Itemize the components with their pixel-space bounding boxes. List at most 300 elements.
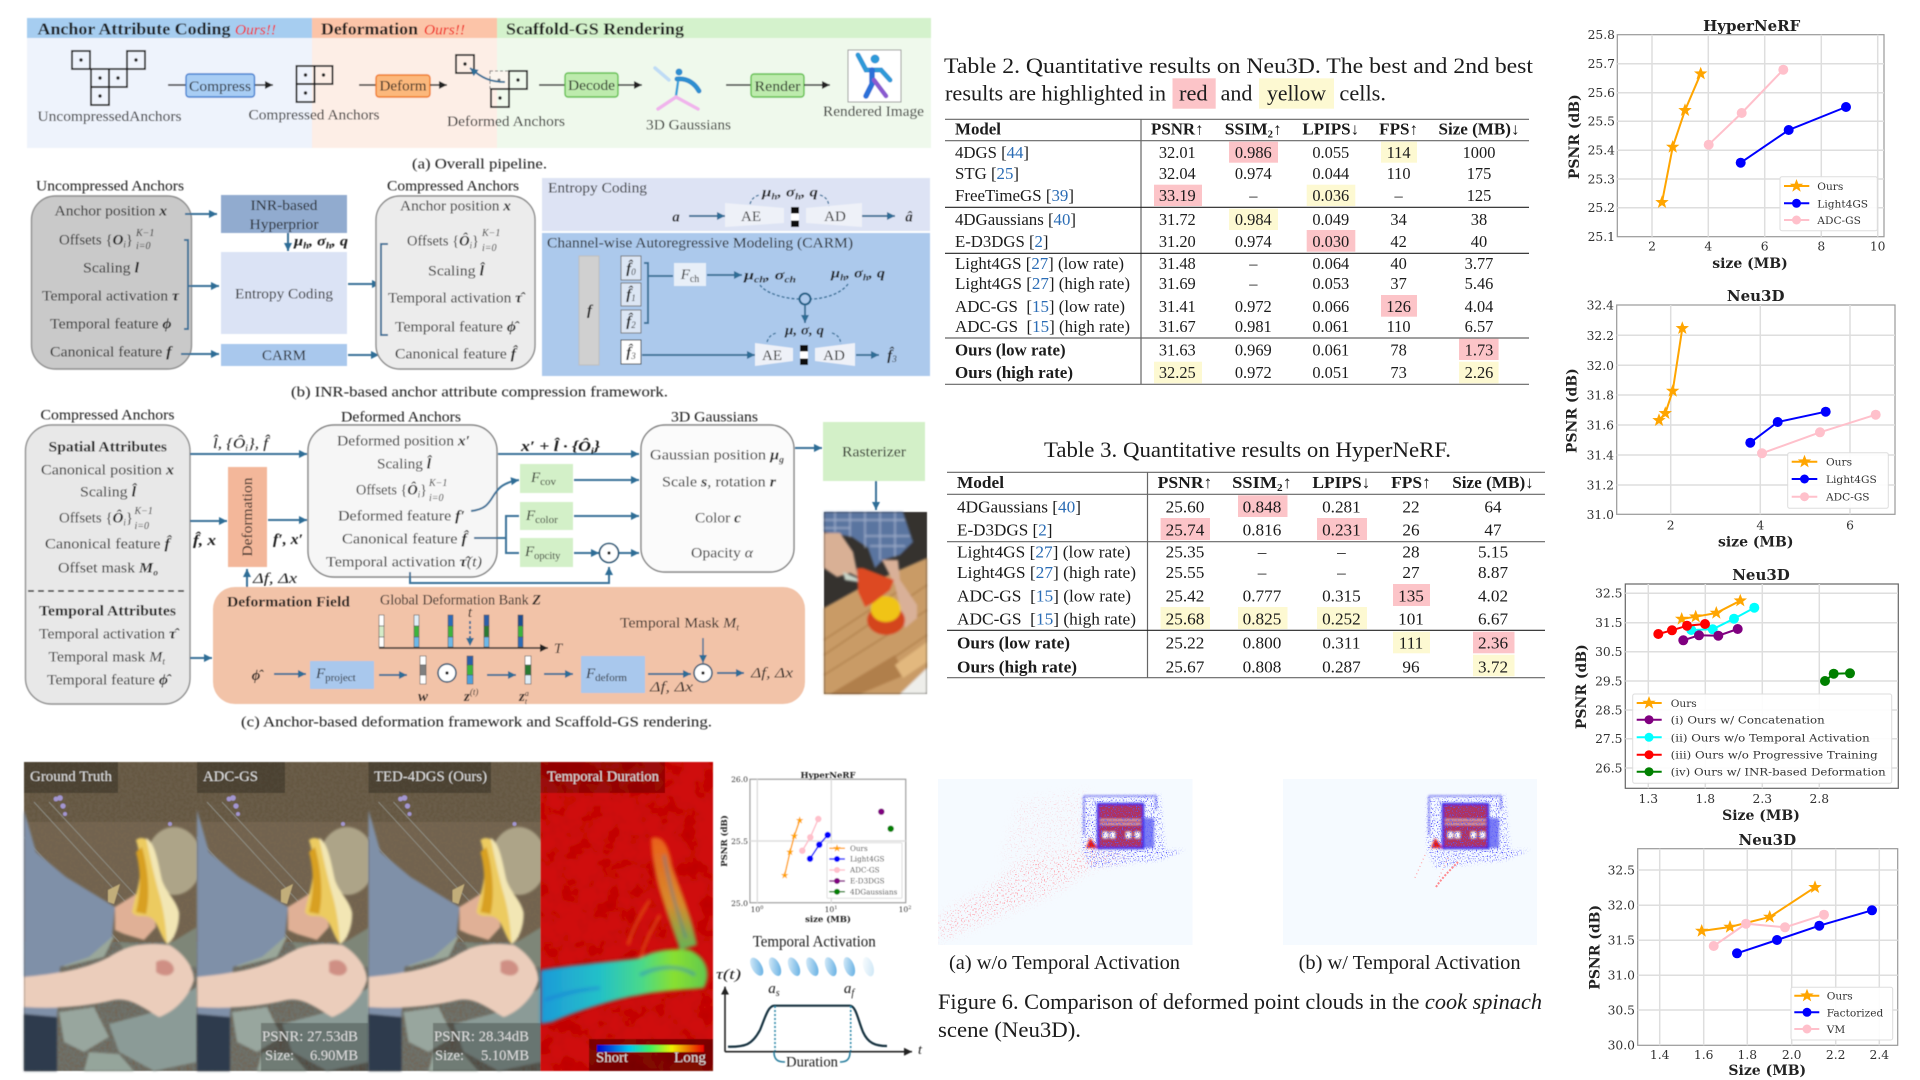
- arrows: attributes to deformed anchors: f̂, x: [193, 531, 217, 549]
- table 2: Neu3D results: 0.981: [1235, 317, 1272, 336]
- caption: point cloud b: (b) w/ Temporal Activation: [1299, 952, 1521, 974]
- chart: Neu3D rate-distortion: 32.0: [1587, 359, 1614, 373]
- table 3: HyperNeRF results: 0.777: [1243, 586, 1282, 605]
- panel: channel-wise autoregressive modeling: ch: [754, 274, 766, 284]
- chart: HyperNeRF rate-distortion: 2: [1648, 240, 1656, 254]
- chart: Neu3D ablation study: Neu3D: [1732, 566, 1790, 584]
- table 2: Neu3D results: 73: [1390, 363, 1407, 382]
- chart: HyperNeRF rate-distortion: 25.7: [1588, 57, 1615, 71]
- table 3: HyperNeRF results: 6.67: [1478, 609, 1508, 628]
- table 3: HyperNeRF results: 5.15: [1478, 542, 1508, 561]
- table 3: HyperNeRF results: 28: [1402, 542, 1420, 561]
- table 2: Neu3D results: 0.972: [1235, 297, 1272, 316]
- box: F_opacity: opcity: [534, 551, 561, 562]
- table 3: HyperNeRF results: 0.315: [1322, 586, 1361, 605]
- table 2: Neu3D results: PSNR↑: [1151, 120, 1204, 138]
- box: CARM: [221, 344, 347, 366]
- table 3: HyperNeRF results: 0.825: [1243, 609, 1281, 628]
- box: uncompressed anchor attributes: K−1: [135, 228, 154, 239]
- box: deformed anchors: i=0: [429, 493, 444, 504]
- table 2: Neu3D results: FreeTimeGS [39]: [955, 186, 1074, 205]
- table 2: Neu3D results: 110: [1387, 164, 1411, 183]
- table 3: HyperNeRF results: 0.252: [1322, 609, 1361, 628]
- table 2: Neu3D results: 0.066: [1312, 297, 1349, 316]
- chart: HyperNeRF rate-distortion: size (MB): [1712, 256, 1788, 272]
- chart: Neu3D ablation study: (iv) Ours w/ INR-based Deformation: [1671, 767, 1886, 779]
- box: F_opacity: [520, 538, 573, 567]
- arrows: anchors to hyperprior and coding: [181, 214, 219, 354]
- box: spatial and temporal attributes: i: [123, 518, 126, 528]
- table 3: HyperNeRF results: Model: [957, 473, 1004, 492]
- table 3: HyperNeRF results: 0.808: [1243, 657, 1281, 676]
- chart: Neu3D rate-distortion: 31.8: [1587, 388, 1614, 402]
- label: 3D gaussians: 3D Gaussians: [671, 410, 758, 426]
- chart: Neu3D rate-distortion: 4: [1756, 518, 1764, 532]
- chart: HyperNeRF rate-distortion: [1567, 17, 1886, 272]
- table 3: HyperNeRF results: 101: [1398, 609, 1424, 628]
- box: compressed anchor attributes: i: [470, 240, 473, 250]
- box: spatial and temporal attributes: Temporal Attributes: [39, 604, 176, 620]
- table 2: Neu3D results: ADC-GS [15] (high rate): [955, 317, 1130, 336]
- table 3: HyperNeRF results: ↑: [1283, 473, 1292, 492]
- box: spatial and temporal attributes: Temporal mask M: [48, 650, 162, 666]
- panel: channel-wise autoregressive modeling: 2: [631, 320, 636, 330]
- diagram: temporal activation curve: Duration: [786, 1054, 838, 1070]
- diagram: temporal activation curve: s: [776, 988, 780, 999]
- chart: Neu3D rate-distortion: size (MB): [1718, 534, 1793, 550]
- box: deformed anchors: }: [420, 482, 427, 498]
- photo: temporal duration map: Long: [674, 1050, 706, 1066]
- arrow: hyperprior output: h: [326, 240, 332, 250]
- caption (a): (a) Overall pipeline.: [412, 156, 547, 172]
- panel: deformation field: F: [316, 666, 325, 682]
- box: spatial and temporal attributes: Spatial Attributes: [48, 440, 167, 456]
- table 3: HyperNeRF results: 8.87: [1478, 563, 1508, 582]
- box: entropy coding: Entropy Coding: [235, 286, 334, 302]
- box: deformed anchors: Canonical feature f̂: [342, 529, 470, 548]
- caption (c): (c) Anchor-based deformation framework and Scaffold-GS rendering.: [241, 714, 712, 730]
- chart: HyperNeRF rate-distortion: HyperNeRF: [1703, 17, 1801, 35]
- panel: deformation field: Global Deformation Bank Z: [380, 592, 541, 608]
- panel: deformation field: t: [525, 697, 528, 706]
- table 2: Neu3D results: 0.055: [1312, 143, 1349, 162]
- table 3: HyperNeRF results: 25.74: [1166, 521, 1205, 540]
- table 2: Neu3D results: ADC-GS [15] (low rate): [955, 297, 1125, 316]
- panel: deformation field: ϕ̂: [252, 668, 264, 684]
- panel: channel-wise autoregressive modeling: f̂: [626, 287, 631, 303]
- photo: temporal duration map: Short: [596, 1050, 628, 1066]
- chart: Neu3D rate-distortion: [1564, 287, 1895, 550]
- table 2: Neu3D results: 0.969: [1235, 340, 1272, 360]
- chart: Neu3D rate-distortion: ADC-GS: [1825, 492, 1870, 504]
- panel: channel-wise autoregressive modeling: f̂: [626, 345, 631, 361]
- photo: ADC-GS: Size:: [265, 1048, 294, 1064]
- label: uncompressed anchors: UncompressedAnchors: [38, 109, 182, 125]
- table 2: Neu3D results: 31.63: [1159, 340, 1196, 360]
- panel: deformation field: Δf, Δx: [750, 666, 793, 682]
- box: deformed anchors: Offsets {Ô: [356, 482, 418, 498]
- chart: Neu3D rate-distortion: Neu3D: [1727, 287, 1785, 305]
- table 2: Neu3D results: 32.01: [1159, 143, 1196, 162]
- box: compressed anchor attributes: Scaling l̂: [428, 261, 486, 280]
- panel: channel-wise autoregressive modeling: f̂: [887, 348, 892, 364]
- table 3: HyperNeRF results: 0.800: [1243, 633, 1281, 652]
- chart: HyperNeRF rate-distortion: 25.1: [1588, 230, 1615, 244]
- table 2: Neu3D results: 0.049: [1312, 210, 1349, 229]
- chart: HyperNeRF mini scatter: 25.0: [731, 899, 748, 908]
- table 2: Neu3D results: Model: [955, 120, 1001, 138]
- table 2: Neu3D results: –: [1248, 274, 1258, 293]
- box: compressed anchor attributes: Offsets {Ô: [407, 234, 470, 250]
- chart: Neu3D rate-distortion: PSNR (dB): [1564, 368, 1580, 453]
- table 3: HyperNeRF results: E-D3DGS [2]: [957, 521, 1052, 540]
- box: spatial and temporal attributes: Offset mask M: [58, 560, 152, 576]
- table 2: Neu3D results: 125: [1467, 186, 1491, 205]
- arrows: deformed anchors to feature heads: [410, 437, 639, 583]
- chart: Neu3D ablation study: Ours: [1671, 698, 1697, 710]
- panel: deformation field: [213, 587, 805, 706]
- chart: Neu3D entropy model comparison: 32.0: [1608, 899, 1635, 913]
- chart: Neu3D ablation study: 28.5: [1595, 703, 1622, 717]
- photo: TED-4DGS ours: [368, 762, 546, 1071]
- chart: Neu3D entropy model comparison: Factorized: [1827, 1007, 1884, 1019]
- chart: Neu3D ablation study: 1.3: [1639, 792, 1658, 806]
- icon: compressed anchors: [296, 66, 332, 102]
- panel: channel-wise autoregressive modeling: F: [681, 267, 690, 283]
- table 2: Neu3D results: 0.974: [1235, 164, 1272, 183]
- panel: channel-wise autoregressive modeling: , σ: [845, 266, 863, 282]
- chart: Neu3D entropy model comparison: 31.0: [1608, 969, 1635, 983]
- panel: channel-wise autoregressive modeling: 1: [631, 293, 636, 303]
- table 3: HyperNeRF results: LPIPS↓: [1312, 473, 1370, 492]
- table 2: Neu3D results: 0.984: [1235, 210, 1272, 229]
- table 2: Neu3D results: Light4GS [27] (high rate): [955, 274, 1130, 293]
- chart: Neu3D rate-distortion: 31.0: [1587, 508, 1614, 522]
- chart: Neu3D ablation study: (i) Ours w/ Concatenation: [1671, 715, 1825, 727]
- box: compressed anchor attributes: Anchor position x: [400, 198, 512, 214]
- table 2: Neu3D results: –: [1248, 186, 1258, 205]
- panel: entropy coding detail: h: [795, 192, 801, 202]
- table 2: Neu3D results: 6.57: [1465, 317, 1493, 336]
- table 2 caption: Table 2. Quantitative results on Neu3D. The best and 2nd best: [944, 53, 1533, 78]
- label: deformed anchors: Deformed Anchors: [447, 114, 565, 130]
- arrows: attributes to deformed anchors: f′, x′: [273, 532, 303, 548]
- chart: HyperNeRF mini scatter: 25.5: [731, 837, 748, 846]
- diagram: temporal activation curve: a: [768, 981, 776, 997]
- chart: Neu3D entropy model comparison: Size (MB): [1728, 1063, 1806, 1079]
- box: uncompressed anchor attributes: Temporal activation τ: [42, 288, 180, 304]
- chart: HyperNeRF rate-distortion: Light4GS: [1817, 198, 1868, 210]
- figure 6 caption: scene (Neu3D).: [938, 1017, 1081, 1042]
- panel: channel-wise autoregressive modeling: AD: [823, 348, 845, 364]
- table 2 caption: red: [1179, 80, 1208, 106]
- caption (b): (b) INR-based anchor attribute compression framework.: [291, 384, 668, 400]
- box: uncompressed anchor attributes: }: [126, 232, 133, 248]
- box: spatial and temporal attributes: Canonical position x: [41, 462, 175, 478]
- panel: deformation field: T: [554, 641, 564, 657]
- chart: Neu3D entropy model comparison: 2.4: [1870, 1048, 1889, 1062]
- panel: deformation field: Δf, Δx: [649, 680, 693, 696]
- table 2: Neu3D results: 5.46: [1465, 274, 1493, 293]
- table 3 caption: Table 3. Quantitative results on HyperNeRF.: [1044, 437, 1451, 462]
- box: entropy coding: [221, 252, 347, 334]
- chart: HyperNeRF rate-distortion: PSNR (dB): [1567, 94, 1583, 179]
- chart: Neu3D ablation study: 29.5: [1595, 674, 1622, 688]
- arrow: hyperprior output: , q: [331, 234, 348, 250]
- box: F_cov: cov: [540, 476, 557, 488]
- table 3: HyperNeRF results: 111: [1399, 633, 1423, 652]
- table 2: Neu3D results: 31.67: [1159, 317, 1196, 336]
- chart: Neu3D rate-distortion: 32.2: [1587, 329, 1614, 343]
- box: 3D gaussian attributes: Scale s, rotation r: [662, 474, 776, 490]
- table 2: Neu3D results: 31.72: [1159, 210, 1196, 229]
- figure 6 caption: [938, 989, 1542, 1042]
- table 3: HyperNeRF results: 135: [1398, 586, 1424, 605]
- panel: overall pipeline: [27, 18, 931, 172]
- chart: Neu3D entropy model comparison: Neu3D: [1738, 831, 1796, 849]
- photo: temporal duration map: [540, 762, 713, 1071]
- chart: Neu3D entropy model comparison: 31.5: [1608, 934, 1635, 948]
- box: INR-based hyperprior: Hyperprior: [250, 217, 318, 233]
- chart: Neu3D ablation study: 30.5: [1595, 645, 1622, 659]
- chart: Neu3D entropy model comparison: 2.2: [1826, 1048, 1845, 1062]
- diagram: temporal activation curve: [716, 934, 923, 1070]
- table 3: HyperNeRF results: FPS↑: [1391, 473, 1431, 492]
- chart: Neu3D entropy model comparison: VM: [1826, 1024, 1845, 1036]
- box: F_opacity: F: [525, 544, 534, 560]
- box: spatial and temporal attributes: }: [126, 510, 133, 526]
- chart: HyperNeRF rate-distortion: Ours: [1817, 181, 1843, 193]
- arrows: deformed anchors to feature heads: }: [593, 439, 601, 455]
- table 2: Neu3D results: Size (MB)↓: [1438, 120, 1520, 138]
- box: compressed anchor attributes: K−1: [481, 228, 500, 239]
- box: deformed anchors: Scaling l̂: [377, 454, 433, 472]
- table 2: Neu3D results: 0.053: [1312, 274, 1349, 293]
- panel: channel-wise autoregressive modeling: μ: [831, 266, 839, 282]
- box: F_color: color: [535, 514, 558, 526]
- table 3: HyperNeRF results: 0.311: [1322, 633, 1360, 652]
- label: compressed anchors: Compressed Anchors: [40, 408, 175, 424]
- band: scaffold-gs rendering: [497, 18, 931, 148]
- table 2: Neu3D results: 40: [1471, 232, 1487, 251]
- table 3: HyperNeRF results: 22: [1402, 497, 1420, 516]
- table 2: Neu3D results: 2: [1268, 130, 1273, 140]
- table 2: Neu3D results: 37: [1390, 274, 1407, 293]
- chart: Neu3D rate-distortion: 31.4: [1587, 448, 1614, 462]
- table 2: Neu3D results: –: [1393, 186, 1403, 205]
- box: rasterizer: Rasterizer: [842, 444, 906, 460]
- arrow: rasterizer to image: [875, 481, 877, 510]
- table 2 caption: [944, 53, 1533, 109]
- box: INR-based hyperprior: [221, 195, 347, 233]
- table 2: Neu3D results: LPIPS↓: [1302, 120, 1359, 138]
- box: spatial and temporal attributes: [26, 425, 190, 704]
- table 3: HyperNeRF results: 25.67: [1166, 657, 1205, 676]
- chart: HyperNeRF rate-distortion: 25.5: [1588, 115, 1615, 129]
- table 3: HyperNeRF results: 96: [1402, 657, 1420, 676]
- arrow and box: render: Render: [754, 79, 800, 95]
- chart: Neu3D ablation study: 2.8: [1810, 792, 1829, 806]
- table 3: HyperNeRF results: 26: [1402, 521, 1420, 540]
- table 3: HyperNeRF results: SSIM: [1232, 473, 1274, 492]
- table 2: Neu3D results: 31.41: [1159, 297, 1196, 316]
- chart: HyperNeRF rate-distortion: 25.8: [1588, 28, 1615, 42]
- point cloud: without temporal activation: [938, 779, 1192, 945]
- band: deformation: [312, 18, 497, 148]
- table 2: Neu3D results: 0.044: [1312, 164, 1349, 183]
- table 2: Neu3D results: Light4GS [27] (low rate): [955, 254, 1124, 273]
- arrow and box: compress: [168, 74, 273, 97]
- panel: channel-wise autoregressive modeling: 0: [631, 267, 636, 277]
- chart: Neu3D entropy model comparison: 1.6: [1694, 1048, 1714, 1062]
- box: deformation: Deformation: [240, 477, 256, 557]
- panel: channel-wise autoregressive modeling: μ: [744, 268, 752, 284]
- table 2: Neu3D results: 31.20: [1159, 232, 1196, 251]
- box: uncompressed anchor attributes: Scaling l: [83, 260, 140, 276]
- panel: entropy coding detail: , q: [800, 186, 818, 200]
- table 3: HyperNeRF results: –: [1257, 542, 1267, 561]
- diagram: temporal activation curve: t: [918, 1043, 923, 1058]
- box: uncompressed anchor attributes: [32, 196, 192, 369]
- table 3: HyperNeRF results: 4.02: [1478, 586, 1508, 605]
- chart: Neu3D ablation study: PSNR (dB): [1574, 644, 1590, 729]
- table 2: Neu3D results: ↑: [1273, 120, 1282, 138]
- panel: INR-based compression framework: [32, 178, 930, 400]
- table 2: Neu3D results: 114: [1387, 143, 1411, 162]
- table 3: HyperNeRF results: ADC-GS [15] (low rate): [957, 586, 1131, 605]
- table 2: Neu3D results: 0.061: [1312, 317, 1349, 336]
- table 2: Neu3D results: 1.73: [1465, 340, 1493, 360]
- box: deformed anchors: [308, 425, 497, 577]
- table 2: Neu3D results: E-D3DGS [2]: [955, 232, 1048, 251]
- photo: TED-4DGS ours: Size:: [435, 1048, 464, 1064]
- box: deformed anchors: Temporal activation τ̂(t): [326, 554, 482, 570]
- table 3: HyperNeRF results: –: [1336, 563, 1346, 582]
- box: compressed anchor attributes: }: [472, 234, 479, 250]
- table 3: HyperNeRF results: ADC-GS [15] (high rate): [957, 609, 1136, 628]
- photo: ground truth: Ground Truth: [30, 769, 113, 785]
- arrows: attributes to deformed anchors: i: [245, 443, 249, 453]
- arrows: coding to compressed anchors: [348, 284, 380, 355]
- table 2: Neu3D results: SSIM: [1225, 120, 1265, 138]
- table 3: HyperNeRF results: –: [1336, 542, 1346, 561]
- table 3: HyperNeRF results: 47: [1484, 521, 1502, 540]
- table 2: Neu3D results: 78: [1390, 340, 1407, 360]
- chart: Neu3D ablation study: 1.8: [1696, 792, 1715, 806]
- table 3: HyperNeRF results: 0.848: [1243, 497, 1281, 516]
- box: uncompressed anchor attributes: Canonical feature f: [50, 344, 174, 360]
- box: compressed anchor attributes: Canonical feature f̂: [395, 344, 519, 362]
- box: 3D gaussian attributes: g: [778, 454, 785, 464]
- chart: HyperNeRF rate-distortion: ADC-GS: [1816, 215, 1861, 227]
- box: uncompressed anchor attributes: Anchor position x: [54, 204, 168, 220]
- table 2: Neu3D results: 0.030: [1312, 232, 1349, 251]
- table 3: HyperNeRF results: Size (MB)↓: [1452, 473, 1534, 492]
- band: anchor attribute coding: Ours!!: [235, 22, 276, 38]
- table 2: Neu3D results: 31.69: [1159, 274, 1196, 293]
- table 2: Neu3D results: 0.061: [1312, 340, 1349, 360]
- chart: Neu3D rate-distortion: 31.6: [1587, 418, 1614, 432]
- table 3: HyperNeRF results: –: [1257, 563, 1267, 582]
- chart: HyperNeRF rate-distortion: 8: [1817, 240, 1825, 254]
- chart: HyperNeRF rate-distortion: 6: [1761, 240, 1769, 254]
- chart: HyperNeRF mini scatter: HyperNeRF: [800, 771, 856, 781]
- chart: Neu3D ablation study: 27.5: [1595, 732, 1622, 746]
- photo: ADC-GS: [197, 762, 375, 1071]
- table 2: Neu3D results: Ours (low rate): [955, 340, 1066, 360]
- table 3: HyperNeRF results: 25.42: [1166, 586, 1204, 605]
- panel: channel-wise autoregressive modeling: μ, σ, q: [784, 324, 824, 338]
- table 2: Neu3D results: 3.77: [1465, 254, 1493, 273]
- table 2: Neu3D results: 0.986: [1235, 143, 1272, 162]
- panel: channel-wise autoregressive modeling: AE: [762, 348, 782, 364]
- label: deformed anchors: Deformed Anchors: [341, 410, 461, 426]
- panel: deformation field: t: [736, 622, 740, 632]
- table 2: Neu3D results: 110: [1387, 317, 1411, 336]
- table 3: HyperNeRF results: 0.231: [1322, 521, 1361, 540]
- band: anchor attribute coding: [27, 18, 312, 148]
- arrow: hyperprior output: h: [303, 240, 309, 250]
- chart: Neu3D rate-distortion: Light4GS: [1826, 474, 1877, 486]
- panel: entropy coding detail: Entropy Coding: [548, 180, 648, 196]
- box: uncompressed anchor attributes: Temporal feature ϕ: [50, 316, 172, 332]
- panel: channel-wise autoregressive modeling: Channel-wise Autoregressive Modeling (CARM): [547, 236, 853, 252]
- chart: HyperNeRF mini scatter: Ours: [850, 844, 868, 853]
- box: spatial and temporal attributes: t: [162, 656, 166, 666]
- box: F_color: F: [526, 508, 535, 524]
- panel: channel-wise autoregressive modeling: f: [587, 303, 594, 319]
- band: anchor attribute coding: Anchor Attribute Coding: [38, 20, 231, 38]
- chart: HyperNeRF mini scatter: 26.0: [731, 775, 748, 784]
- table 3: HyperNeRF results: 0.287: [1322, 657, 1361, 676]
- chart: Neu3D entropy model comparison: 1.4: [1650, 1048, 1670, 1062]
- table 2: Neu3D results: [945, 119, 1529, 384]
- label: compressed anchors: Compressed Anchors: [248, 108, 380, 124]
- box: spatial and temporal attributes: K−1: [134, 506, 153, 517]
- diagram: temporal activation curve: a: [844, 981, 851, 997]
- table 3: HyperNeRF results: 25.60: [1166, 497, 1204, 516]
- table 2: Neu3D results: 40: [1390, 254, 1407, 273]
- caption: point cloud a: (a) w/o Temporal Activation: [949, 952, 1180, 974]
- table 3: HyperNeRF results: 3.72: [1478, 657, 1508, 676]
- table 2: Neu3D results: 32.25: [1159, 363, 1196, 382]
- box: F_color: [520, 502, 573, 530]
- table 2: Neu3D results: 4.04: [1465, 297, 1493, 316]
- panel: entropy coding detail: , σ: [776, 186, 796, 200]
- table 2: Neu3D results: 31.48: [1159, 254, 1196, 273]
- table 2: Neu3D results: 33.19: [1159, 186, 1196, 205]
- table 2 caption: cells.: [1339, 80, 1386, 106]
- table 3: HyperNeRF results: PSNR↑: [1158, 473, 1212, 492]
- label: rendered image: Rendered Image: [823, 104, 924, 120]
- chart: HyperNeRF rate-distortion: 25.6: [1588, 86, 1615, 100]
- table 3: HyperNeRF results: Ours (high rate): [957, 657, 1077, 676]
- diagram: temporal activation curve: τ(t): [716, 967, 741, 983]
- box: uncompressed anchor attributes: Offsets {O: [59, 232, 123, 248]
- table 2: Neu3D results: 1000: [1463, 143, 1495, 162]
- table 3: HyperNeRF results: 0.281: [1322, 497, 1361, 516]
- label: compressed anchors: Compressed Anchors: [387, 178, 519, 194]
- table 2: Neu3D results: 32.04: [1159, 164, 1196, 183]
- chart: HyperNeRF mini scatter: 10: [899, 905, 908, 914]
- icon: deformed anchors: [456, 55, 527, 107]
- point cloud: with temporal activation: [1283, 779, 1537, 945]
- chart: Neu3D entropy model comparison: 2.0: [1782, 1048, 1801, 1062]
- photo: ground truth: [24, 762, 202, 1071]
- box: 3D gaussian attributes: Color c: [695, 510, 741, 526]
- table 3: HyperNeRF results: 25.22: [1166, 633, 1204, 652]
- box: compressed anchor attributes: Temporal feature ϕ̂: [395, 320, 520, 336]
